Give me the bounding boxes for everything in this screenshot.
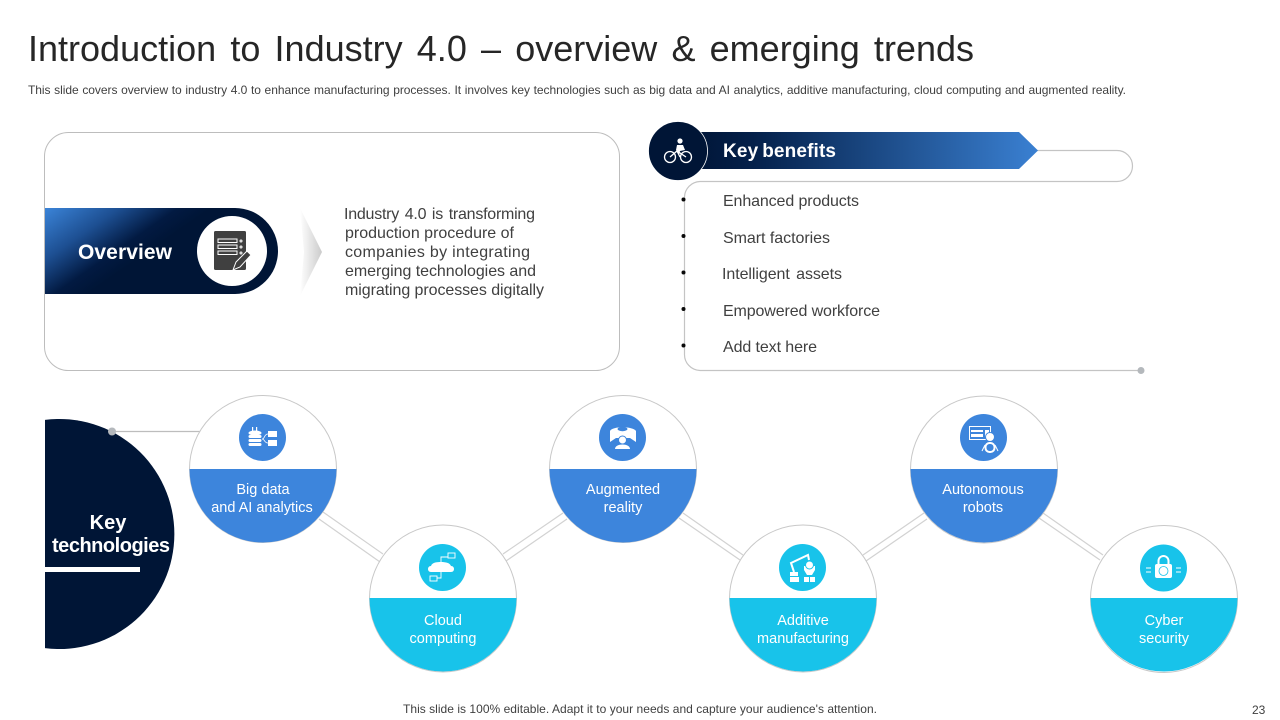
key benefits banner [690, 132, 1038, 169]
node: additive manufacturing: manufacturing [757, 631, 849, 647]
node: cloud computing: Cloud [424, 613, 462, 629]
icon: database [239, 414, 286, 461]
benefits list: Enhanced products [723, 193, 859, 210]
node: autonomous robots: robots [963, 500, 1003, 516]
benefits list: Smart factories [723, 230, 830, 247]
icon: AR headset user [599, 414, 646, 461]
node: additive manufacturing: Additive [777, 613, 829, 629]
key benefits heading: Key benefits [723, 141, 836, 162]
node: cloud computing: computing [410, 631, 476, 647]
title: Introduction to Industry 4.0 – overview & emerging trends [28, 28, 974, 69]
overview text: migrating processes digitally [345, 282, 544, 299]
subtitle description: This slide covers overview to industry 4.0 to enhance manufacturing processes. It involves key technologies such as big data and AI analytics, additive manufacturing, cloud computing and augmented reality. [28, 83, 1126, 97]
node: augmented reality: Augmented [586, 482, 660, 498]
icon: notepad and pen [197, 216, 267, 286]
benefits list: Add text here [723, 339, 817, 356]
overview text: Industry 4.0 is transforming [344, 206, 535, 223]
page number: 23 [1252, 703, 1266, 717]
panel: overview [44, 132, 620, 370]
icon: robotic arm [779, 544, 826, 591]
node: big data and AI analytics [190, 396, 336, 542]
benefits list: Intelligent assets [722, 266, 842, 283]
footer note: This slide is 100% editable. Adapt it to your needs and capture your audience's attention. [403, 702, 877, 716]
node: autonomous robots: Autonomous [942, 482, 1024, 498]
icon: robot and screen [960, 414, 1007, 461]
panel: key technologies semicircle: technologies [52, 535, 170, 557]
node: additive manufacturing [730, 525, 876, 672]
icon: cyclist [648, 122, 708, 180]
node: augmented reality: reality [604, 500, 643, 516]
panel: key benefits [648, 122, 1144, 374]
overview banner [45, 208, 278, 294]
benefits outline [684, 150, 1141, 370]
panel: key technologies semicircle [45, 419, 174, 649]
node: augmented reality [550, 396, 696, 542]
node: big data and AI analytics: and AI analytics [211, 500, 313, 516]
chevron arrow [300, 208, 322, 296]
overview text: production procedure of [345, 225, 515, 242]
benefits list: Empowered workforce [723, 303, 880, 320]
key technologies heading: Key [90, 512, 127, 534]
overview text [344, 206, 544, 299]
overview text: emerging technologies and [345, 263, 536, 280]
leader line [108, 428, 200, 436]
node: cyber security: security [1139, 631, 1190, 647]
icon: cloud network [419, 544, 466, 591]
node: cyber security: Cyber [1145, 613, 1184, 629]
node: big data and AI analytics: Big data [236, 482, 291, 498]
benefits list [682, 193, 880, 356]
connectors between circles [319, 512, 1103, 562]
node: autonomous robots [910, 396, 1058, 543]
overview heading: Overview [78, 241, 173, 264]
node: cloud computing [370, 525, 516, 672]
node: cyber security [1090, 526, 1238, 672]
overview text: companies by integrating [345, 244, 530, 261]
icon: padlock [1140, 544, 1187, 592]
